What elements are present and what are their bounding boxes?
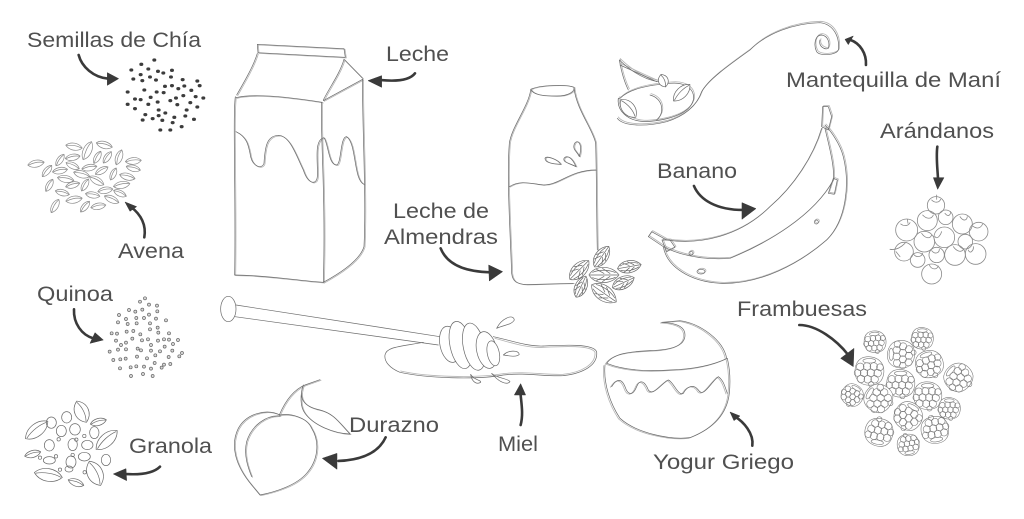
icon: almonds [565, 243, 642, 308]
label: Leche: Leche [386, 43, 449, 66]
arrow: leche [368, 73, 415, 87]
icon: milk carton [234, 44, 366, 283]
label: Leche de Almendras [384, 200, 498, 249]
label: Granola: Granola [129, 435, 212, 458]
icon: honey dipper [221, 296, 597, 383]
arrow: chía [79, 55, 119, 85]
arrow: granola [113, 467, 160, 481]
arrow: mantequilla de maní [845, 36, 866, 65]
arrow: banano [694, 186, 756, 219]
label: Banano: Banano [657, 160, 737, 183]
label: Miel: Miel [498, 433, 538, 456]
icon: banana [648, 106, 847, 283]
icon: chia seeds [126, 58, 205, 132]
icon: blueberries [890, 195, 988, 284]
arrow: miel [514, 384, 526, 425]
arrow: quinoa [74, 309, 103, 343]
label: Leche de Almendras: Almendras [384, 226, 498, 249]
label: Arándanos: Arándanos [880, 120, 994, 143]
label: Quinoa: Quinoa [37, 283, 113, 306]
label: Semillas de Chía: Semillas de Chía [27, 29, 201, 52]
icon: granola [22, 398, 121, 489]
arrow: arándanos [933, 147, 944, 189]
label: Frambuesas: Frambuesas [737, 298, 867, 321]
label: Yogur Griego: Yogur Griego [653, 451, 794, 474]
label: Avena: Avena [118, 240, 184, 263]
label: Durazno: Durazno [349, 414, 439, 437]
icon: peach [234, 380, 351, 496]
label: Leche de Almendras: Leche de [393, 200, 489, 223]
arrow: frambuesas [799, 325, 854, 367]
icon: almond milk bottle [508, 85, 598, 285]
icon: oats [27, 139, 142, 214]
icon: greek yogurt bowl [603, 321, 730, 439]
arrow: yogur griego [730, 412, 752, 446]
arrow: leche de almendras [441, 248, 503, 281]
arrow: avena [125, 202, 145, 237]
icon: raspberries [836, 328, 979, 458]
icon: quinoa seeds [108, 297, 183, 377]
arrow: durazno [322, 437, 386, 469]
label: Mantequilla de Maní: Mantequilla de Maní [786, 69, 1001, 92]
icon: spoon with peanut butter [616, 21, 840, 125]
